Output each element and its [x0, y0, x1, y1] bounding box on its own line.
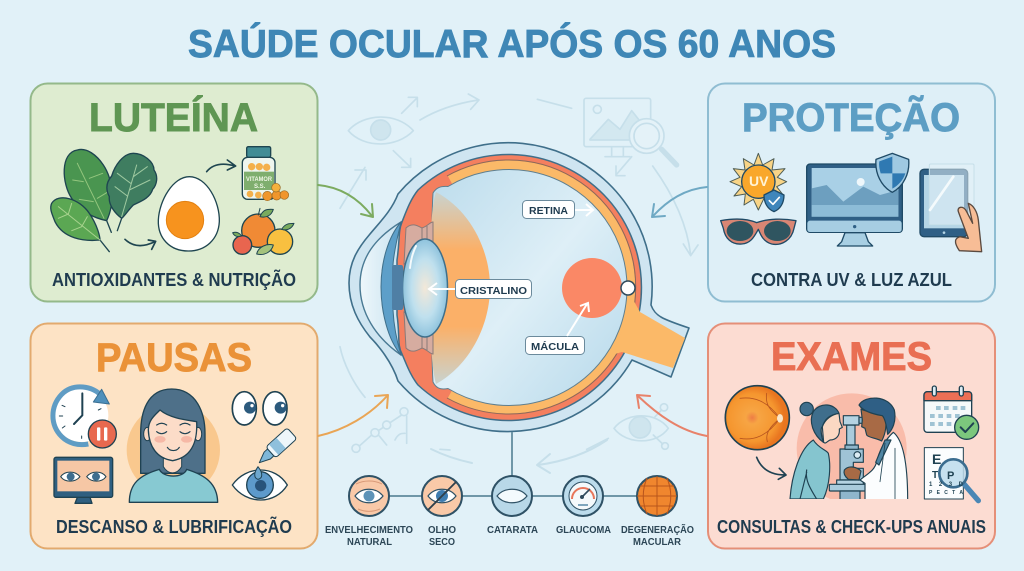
optic nerve [608, 296, 685, 368]
label: cristalino [429, 280, 532, 298]
icons: leafy greens, egg, vitamins and fruit [51, 147, 294, 254]
lower ghost arrows [431, 440, 607, 473]
retina ring [450, 165, 631, 409]
label: retina [522, 200, 593, 218]
panel: exames: P E C T A [929, 490, 963, 496]
caption: antioxidantes: ANTIOXIDANTES & NUTRIÇÃO [52, 269, 296, 290]
panel: luteína [30, 84, 318, 302]
heading: proteção: PROTEÇÃO [742, 94, 960, 140]
caption: consultas: CONSULTAS & CHECK-UPS ANUAIS [717, 517, 986, 537]
panel: exames: 1 2 3 D [929, 482, 964, 488]
labels: GLAUCOMA [556, 524, 611, 536]
choroid [397, 155, 641, 421]
sclera and optic sheath [349, 143, 689, 432]
cornea [360, 222, 401, 355]
arrow: proteção to eye [652, 187, 707, 217]
timeline: age-related conditions [325, 432, 694, 548]
arrow: luteína to eye [318, 185, 373, 217]
icons: retina, calendar, eye chart [725, 386, 979, 501]
vitreous [432, 170, 627, 406]
macula [562, 258, 622, 318]
iris [381, 222, 401, 355]
icon: natural ageing [349, 476, 389, 516]
arrow: exames to eye [637, 395, 707, 436]
icon: macular degeneration [637, 476, 677, 516]
panel: luteína: S.S. [254, 184, 266, 190]
labels: SECO [429, 536, 455, 548]
panel: pausas [30, 324, 318, 548]
eye examination scene [790, 393, 908, 503]
labels: MACULAR [633, 536, 681, 548]
retina ring outline [447, 160, 636, 414]
panel: proteção [708, 84, 995, 302]
panel: exames: P [947, 470, 954, 482]
optic disc [621, 281, 635, 295]
bottle label text: VITAMOR [246, 177, 273, 183]
panel: exames [708, 324, 995, 548]
eye chart letters: E [932, 451, 941, 467]
icons: sun, sunglasses, monitor, tablet [721, 153, 982, 252]
pupil [392, 265, 403, 310]
background ghost icons and arrows [340, 94, 698, 452]
icon: glaucoma [563, 476, 603, 516]
label: cristalino: CRISTALINO [460, 285, 527, 297]
labels: CATARATA [487, 524, 538, 536]
heading: exames: EXAMES [771, 335, 932, 379]
icon: cataract [492, 476, 532, 516]
labels: DEGENERAÇÃO [621, 523, 694, 536]
heading: pausas: PAUSAS [96, 336, 252, 380]
labels: NATURAL [347, 536, 393, 548]
ciliary body and zonules [404, 222, 433, 354]
uv badge text: UV [749, 173, 769, 189]
panel: exames: T [932, 470, 938, 481]
label: retina: RETINA [529, 205, 568, 217]
icons: clock, screen, woman resting, eyes and eye drops [53, 387, 297, 503]
heading: luteína: LUTEÍNA [89, 95, 258, 140]
labels [325, 523, 694, 548]
label: mácula [526, 303, 589, 354]
lens [402, 239, 448, 337]
labels: ENVELHECIMENTO [325, 524, 413, 536]
label: mácula: MÁCULA [531, 340, 579, 353]
arrow: pausas to eye [318, 395, 388, 436]
icon: dry eye [422, 476, 462, 516]
eye cross-section diagram [349, 143, 689, 432]
orange crescent [431, 192, 490, 384]
caption: contra uv: CONTRA UV & LUZ AZUL [751, 270, 952, 290]
title: SAÚDE OCULAR APÓS OS 60 ANOS [188, 22, 836, 66]
labels: OLHO [428, 524, 456, 536]
caption: descanso: DESCANSO & LUBRIFICAÇÃO [56, 516, 292, 537]
